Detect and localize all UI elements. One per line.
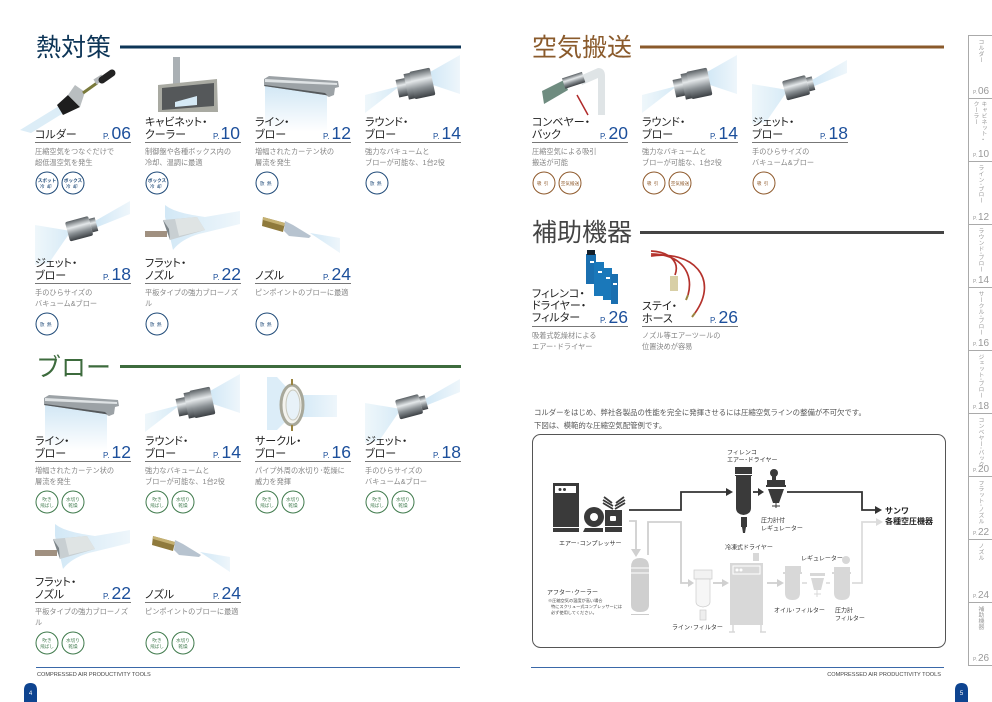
product: ステイ・ホース [642, 251, 738, 351]
product: ライン・ブロー: 放熱 [260, 180, 274, 187]
product: ステイ・ホース: 位置決めが容易 [642, 342, 692, 351]
product: ラウンド・ブロー (空気搬送): ラウンド・ [642, 116, 685, 128]
product: ライン・ブロー (ブロー): 12 [112, 442, 131, 462]
product: ラウンド・ブロー (空気搬送): P. [710, 132, 717, 141]
diagram labels: 圧力計付 [761, 516, 785, 524]
arrow: gray line to after cooler [629, 521, 641, 557]
product: ノズル (ブロー) [145, 536, 241, 654]
side index tabs: ノズル [977, 543, 984, 561]
heading: 熱対策 [36, 34, 461, 62]
product: フィレンコ・ドライヤー・フィルター: フィルター [532, 311, 580, 324]
product: ジェット・ブロー (熱対策): 放熱 [40, 321, 54, 328]
panel: compressed air piping diagram [532, 434, 946, 648]
product: サークル・ブロー: パイプ外周の水切り･乾燥に [255, 466, 345, 475]
product: ジェット・ブロー (空気搬送) [752, 60, 848, 194]
product: ラウンド・ブロー (ブロー): 14 [222, 442, 241, 462]
side index tabs: P. [973, 153, 977, 159]
product: コンベヤー・バック: 吸引 [537, 180, 551, 187]
product: コルダー: 冷却 [66, 183, 80, 190]
product: ジェット・ブロー (空気搬送): ジェット・ [752, 116, 794, 128]
product: ラウンド・ブロー (空気搬送): 空気搬送 [671, 180, 690, 187]
product: フラット・ノズル (熱対策): 平板タイプの強力ブローノズ [145, 288, 238, 297]
side index tabs: ラウンド･ブロー [977, 228, 984, 272]
icon: oil filter [783, 566, 802, 600]
product: ライン・ブロー (ブロー): ブロー [35, 446, 66, 460]
arrow: gray line to line filter [648, 522, 694, 587]
product: ノズル (ブロー): P. [213, 592, 220, 601]
product: ラウンド・ブロー (空気搬送): ブローが可能な、1台2役 [642, 158, 722, 167]
product: キャビネット・クーラー [145, 57, 241, 194]
product: ライン・ブロー: ブロー [255, 127, 286, 141]
arrow: line filter to dryer [713, 579, 729, 587]
product: サークル・ブロー: 乾燥 [288, 502, 298, 509]
product: ジェット・ブロー (空気搬送): バキューム&ブロー [752, 158, 814, 167]
product: コンベヤー・バック: 空気搬送 [561, 180, 580, 187]
side index tabs: ライン･ブロー [977, 165, 984, 203]
diagram labels: 圧力計 [835, 606, 853, 614]
product: ノズル (ブロー): ノズル [145, 587, 174, 601]
product: ノズル (ブロー): 吹き [152, 637, 162, 644]
footer: left page: 4 [29, 691, 33, 697]
product: ライン・ブロー [255, 76, 351, 194]
product: フラット・ノズル (ブロー): 乾燥 [68, 643, 78, 650]
diagram labels: 必ず使用してください。 [551, 609, 597, 616]
icon: refrigerated dryer [729, 553, 766, 632]
icon: regulator [802, 573, 830, 597]
product: サークル・ブロー: 飛ばし [260, 502, 274, 509]
product: ジェット・ブロー (ブロー): 乾燥 [398, 502, 408, 509]
product: ラウンド・ブロー [365, 55, 461, 194]
product: ノズル (熱対策): 放熱 [260, 321, 274, 328]
icon: regulator with gauge [766, 469, 786, 508]
product: フラット・ノズル (熱対策): フラット・ [145, 258, 186, 270]
product: ラウンド・ブロー: P. [433, 132, 440, 141]
product: ノズル (ブロー): 24 [222, 583, 241, 603]
side index tabs: 18 [978, 401, 990, 412]
diagram labels: 各種空圧機器 [885, 516, 933, 526]
product: フラット・ノズル (熱対策): 22 [222, 264, 241, 284]
icon: air compressor [553, 483, 625, 532]
heading: 補助機器 [532, 219, 944, 247]
product: ジェット・ブロー (ブロー): 手のひらサイズの [365, 466, 422, 475]
product: ジェット・ブロー (ブロー): 水切り [396, 496, 410, 503]
product: フラット・ノズル (熱対策): 放熱 [150, 321, 164, 328]
product: キャビネット・クーラー: 冷却 [150, 183, 164, 190]
product: ラウンド・ブロー (ブロー): ブロー [145, 446, 176, 460]
product: コルダー: 06 [112, 123, 131, 143]
product: ラウンド・ブロー (ブロー): 乾燥 [178, 502, 188, 509]
side index tabs: 10 [978, 149, 990, 160]
product: ライン・ブロー: 層流を発生 [255, 158, 291, 167]
product: コルダー: 超低温空気を発生 [35, 158, 93, 167]
product: フィレンコ・ドライヤー・フィルター: P. [600, 316, 607, 325]
side index tabs: フラット･ノズル [977, 480, 984, 525]
product: ジェット・ブロー (ブロー): ジェット・ [365, 436, 407, 448]
product: キャビネット・クーラー: クーラー [145, 128, 186, 141]
product: ラウンド・ブロー (空気搬送): 吸引 [647, 180, 661, 187]
heading: 補助機器: 補助機器 [532, 219, 632, 247]
heading: 空気搬送: 空気搬送 [532, 34, 632, 62]
product: ライン・ブロー (ブロー): 乾燥 [68, 502, 78, 509]
intro text: コルダーをはじめ、弊社各製品の性能を完全に発揮させるには圧縮空気ラインの整備が不可欠です。 [534, 408, 866, 417]
product: キャビネット・クーラー: 制御盤や各種ボックス内の [145, 147, 231, 156]
product: ラウンド・ブロー: ブロー [365, 127, 396, 141]
product: フィレンコ・ドライヤー・フィルター: ドライヤー・ [532, 300, 586, 312]
heading: ブロー: ブロー [36, 354, 111, 382]
product: ラウンド・ブロー (ブロー): 飛ばし [150, 502, 164, 509]
product: フィレンコ・ドライヤー・フィルター: 26 [609, 307, 628, 327]
product: キャビネット・クーラー: キャビネット・ [145, 116, 208, 128]
product: コルダー: スポット [38, 177, 56, 184]
product: ラウンド・ブロー (ブロー): 水切り [176, 496, 190, 503]
product: ラウンド・ブロー: ブローが可能な、1台2役 [365, 158, 445, 167]
side index tabs: 22 [978, 527, 990, 538]
product: コンベヤー・バック: P. [600, 132, 607, 141]
product: ジェット・ブロー (熱対策): 18 [112, 264, 131, 284]
product: キャビネット・クーラー: 冷却、温調に最適 [145, 158, 203, 167]
product: ジェット・ブロー (空気搬送): 18 [829, 123, 848, 143]
side index tabs: P. [973, 468, 977, 474]
product: ノズル (ブロー): ピンポイントのブローに最適 [145, 607, 238, 616]
icon: line filter [694, 570, 712, 620]
intro text: 下図は、模範的な圧縮空気配管例です。 [534, 421, 666, 430]
footer: right page [531, 668, 968, 702]
product: コルダー: ボックス [64, 177, 83, 184]
side index tabs: P. [973, 657, 977, 663]
footer: right page: 5 [960, 691, 964, 697]
arrow: gray line to equipment [852, 518, 883, 583]
side index tabs: P. [973, 279, 977, 285]
arrow: main dark line to equipment [787, 492, 882, 514]
diagram labels: フィルター [835, 614, 865, 622]
product: コンベヤー・バック: コンベヤー・ [532, 116, 590, 128]
heading: 空気搬送 [532, 34, 944, 62]
product: ライン・ブロー (ブロー): 層流を発生 [35, 477, 71, 486]
product: ライン・ブロー: ライン・ [255, 116, 289, 128]
side index tabs [968, 36, 992, 666]
product: ライン・ブロー: P. [323, 132, 330, 141]
product: フラット・ノズル (ブロー): ノズル [35, 587, 64, 601]
diagram labels: サンワ [885, 506, 909, 516]
footer: left page: COMPRESSED AIR PRODUCTIVITY TOOLS [37, 672, 151, 678]
product: フラット・ノズル (熱対策): ノズル [145, 268, 174, 282]
product: フラット・ノズル (ブロー): P. [103, 592, 110, 601]
product: ラウンド・ブロー (ブロー): ラウンド・ [145, 434, 188, 448]
side index tabs: ジェット･ブロー [977, 354, 984, 398]
diagram labels: レギュレーター [761, 524, 803, 532]
product: コルダー [20, 73, 131, 194]
product: サークル・ブロー: サークル・ [255, 434, 302, 448]
product: ジェット・ブロー (熱対策): 手のひらサイズの [35, 288, 92, 297]
arrow: main dark line to air dryer [629, 488, 733, 510]
product: ジェット・ブロー (空気搬送): P. [820, 132, 827, 141]
product: ライン・ブロー (ブロー): 増幅されたカーテン状の [35, 466, 114, 475]
product: コルダー: 冷却 [40, 183, 54, 190]
product: コルダー: 圧縮空気をつなぐだけで [35, 147, 114, 156]
side index tabs: 16 [978, 338, 990, 349]
product: フラット・ノズル (熱対策): ル [145, 299, 152, 308]
diagram labels: 冷凍式ドライヤー [725, 544, 773, 552]
product: ジェット・ブロー (ブロー): ブロー [365, 446, 396, 460]
footer: right page: COMPRESSED AIR PRODUCTIVITY TOOLS [827, 672, 941, 678]
product: ノズル (ブロー): 水切り [176, 637, 190, 644]
product: ステイ・ホース: 26 [719, 307, 738, 327]
product: ラウンド・ブロー: 放熱 [370, 180, 384, 187]
product: ジェット・ブロー (空気搬送): 手のひらサイズの [752, 147, 809, 156]
product: コルダー: P. [103, 132, 110, 141]
side index tabs: コルダー [977, 39, 984, 63]
product: ジェット・ブロー (熱対策) [35, 201, 131, 335]
arrow: dryer to oil filter [767, 579, 784, 587]
side index tabs: P. [973, 216, 977, 222]
side index tabs: 14 [978, 275, 990, 286]
side index tabs: P. [973, 594, 977, 600]
product: フィレンコ・ドライヤー・フィルター: 吸着式乾燥材による [532, 331, 596, 340]
arrow: air dryer to regulator [753, 488, 764, 496]
product: フラット・ノズル (ブロー): フラット・ [35, 576, 76, 588]
diagram labels: レギュレーター [801, 554, 843, 562]
product: キャビネット・クーラー: ボックス [148, 177, 167, 184]
product: ラウンド・ブロー: 14 [442, 123, 461, 143]
product: フィレンコ・ドライヤー・フィルター [532, 250, 628, 351]
product: ラウンド・ブロー (空気搬送): ブロー [642, 127, 673, 141]
product: サークル・ブロー: 威力を発揮 [255, 477, 291, 486]
footer: left page [24, 668, 460, 702]
product: ノズル (熱対策): ノズル [255, 268, 284, 282]
side index tabs: 24 [978, 590, 990, 601]
diagram labels [547, 450, 933, 632]
product: ジェット・ブロー (熱対策): バキューム&ブロー [35, 299, 97, 308]
product: サークル・ブロー: 吹き [262, 496, 272, 503]
product: フィレンコ・ドライヤー・フィルター: フィレンコ・ [532, 288, 585, 300]
product: フラット・ノズル (熱対策) [145, 205, 241, 335]
product: コンベヤー・バック: バック [532, 128, 561, 141]
side index tabs: 20 [978, 464, 990, 475]
side index tabs: 補助機器 [977, 605, 984, 631]
side index tabs: P. [973, 342, 977, 348]
heading: 熱対策: 熱対策 [36, 34, 111, 62]
product: コンベヤー・バック: 搬送が可能 [532, 158, 568, 167]
product: ライン・ブロー (ブロー): 吹き [42, 496, 52, 503]
product: ライン・ブロー (ブロー): P. [103, 451, 110, 460]
product: ジェット・ブロー (ブロー): 吹き [372, 496, 382, 503]
product: ジェット・ブロー (熱対策): ジェット・ [35, 258, 77, 270]
product: フラット・ノズル (ブロー): 飛ばし [40, 643, 54, 650]
diagram labels: エアー･コンプレッサー [559, 540, 621, 548]
product: キャビネット・クーラー: 10 [221, 123, 240, 143]
product: ノズル (ブロー): 乾燥 [178, 643, 188, 650]
product: ライン・ブロー (ブロー) [35, 395, 131, 513]
icon: air dryer [735, 467, 752, 533]
product: ステイ・ホース: ノズル等エアーツールの [642, 331, 720, 340]
product: コンベヤー・バック: 圧縮空気による吸引 [532, 147, 596, 156]
product: ジェット・ブロー (空気搬送): 吸引 [757, 180, 771, 187]
product: キャビネット・クーラー: P. [213, 132, 220, 141]
side index tabs: クーラー [972, 101, 979, 125]
product: ライン・ブロー (ブロー): 水切り [66, 496, 80, 503]
product: ラウンド・ブロー (ブロー): P. [213, 451, 220, 460]
product: サークル・ブロー: 水切り [286, 496, 300, 503]
intro text [534, 408, 866, 430]
product: ラウンド・ブロー (ブロー) [145, 374, 241, 513]
product: ジェット・ブロー (ブロー) [365, 379, 461, 513]
product: ライン・ブロー (ブロー): ライン・ [35, 436, 69, 448]
product: ラウンド・ブロー (ブロー): 吹き [152, 496, 162, 503]
product: サークル・ブロー: ブロー [255, 446, 286, 460]
product: ラウンド・ブロー: 強力なバキュームと [365, 147, 429, 156]
side index tabs: コンベヤー･バック [977, 417, 984, 467]
heading: ブロー [36, 354, 461, 382]
product: ライン・ブロー: 増幅されたカーテン状の [255, 147, 334, 156]
product: ステイ・ホース: P. [710, 316, 717, 325]
diagram labels: ※圧縮空気の温度が高い場合 [548, 597, 603, 604]
side index tabs: P. [973, 531, 977, 537]
product: ノズル (ブロー): 飛ばし [150, 643, 164, 650]
diagram labels: エアー･ドライヤー [727, 457, 777, 464]
side index tabs: 26 [978, 653, 990, 664]
product: フラット・ノズル (ブロー): 吹き [42, 637, 52, 644]
product: ジェット・ブロー (空気搬送): ブロー [752, 127, 783, 141]
product: フラット・ノズル (熱対策): P. [213, 273, 220, 282]
product: サークル・ブロー [255, 377, 351, 513]
side index tabs: 12 [978, 212, 990, 223]
product: ジェット・ブロー (熱対策): P. [103, 273, 110, 282]
product: フラット・ノズル (ブロー) [35, 524, 131, 654]
diagram labels: アフター･クーラー [547, 588, 598, 596]
product: ラウンド・ブロー (空気搬送): 強力なバキュームと [642, 147, 706, 156]
product: ジェット・ブロー (熱対策): ブロー [35, 268, 66, 282]
product: ノズル (熱対策): ピンポイントのブローに最適 [255, 288, 348, 297]
product: ライン・ブロー (ブロー): 飛ばし [40, 502, 54, 509]
product: ステイ・ホース: ホース [642, 312, 673, 325]
product: ジェット・ブロー (ブロー): 18 [442, 442, 461, 462]
side index tabs: サークル･ブロー [977, 291, 984, 335]
icon: filter with gauge [832, 556, 851, 600]
diagram labels: 特にスクリュー式コンプレッサーには [551, 603, 622, 610]
product: ラウンド・ブロー: ラウンド・ [365, 116, 408, 128]
product: コンベヤー・バック [532, 68, 628, 194]
product: ジェット・ブロー (ブロー): バキューム&ブロー [365, 477, 427, 486]
product: ラウンド・ブロー (空気搬送): 14 [719, 123, 738, 143]
diagram labels: ライン･フィルター [672, 624, 723, 632]
product: コンベヤー・バック: 20 [609, 123, 628, 143]
product: ジェット・ブロー (ブロー): P. [433, 451, 440, 460]
product: サークル・ブロー: P. [323, 451, 330, 460]
side index tabs: キャビネット・ [980, 101, 987, 142]
diagram labels: オイル･フィルター [774, 606, 825, 614]
product: ラウンド・ブロー (ブロー): ブローが可能な、1台2役 [145, 477, 225, 486]
side index tabs: 06 [978, 86, 990, 97]
product: ノズル (熱対策) [255, 217, 351, 335]
product: フラット・ノズル (ブロー): 22 [112, 583, 131, 603]
product: フラット・ノズル (ブロー): ル [35, 618, 42, 627]
product: ラウンド・ブロー (空気搬送) [642, 55, 738, 194]
product: ジェット・ブロー (ブロー): 飛ばし [370, 502, 384, 509]
side index tabs: P. [973, 90, 977, 96]
product: フィレンコ・ドライヤー・フィルター: エアー･ドライヤー [532, 342, 592, 351]
icon: after cooler [631, 558, 649, 615]
diagram labels: フィレンコ [727, 450, 757, 456]
product: ノズル (熱対策): 24 [332, 264, 351, 284]
product: ラウンド・ブロー (ブロー): 強力なバキュームと [145, 466, 209, 475]
product: ライン・ブロー: 12 [332, 123, 351, 143]
product: ステイ・ホース: ステイ・ [642, 300, 677, 312]
product: フラット・ノズル (ブロー): 平板タイプの強力ブローノズ [35, 607, 128, 616]
product: コルダー: コルダー [35, 127, 77, 141]
product: サークル・ブロー: 16 [332, 442, 351, 462]
product: フラット・ノズル (ブロー): 水切り [66, 637, 80, 644]
product: ノズル (熱対策): P. [323, 273, 330, 282]
side index tabs: P. [973, 405, 977, 411]
